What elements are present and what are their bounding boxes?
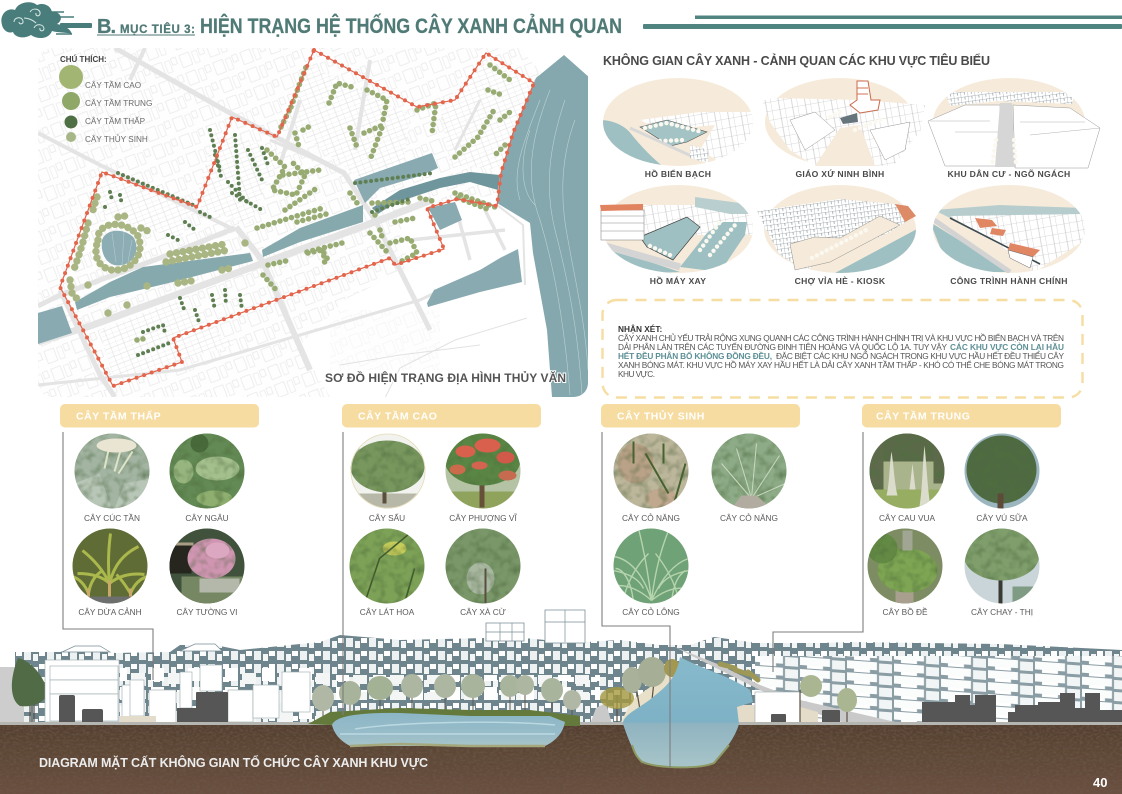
callout: assessment note: HẾT ĐỀU PHÂN BỐ KHÔNG ĐỒNG ĐỀU, [618,350,772,361]
trees: light clusters [96,224,140,270]
vignette labels: HỒ MÁY XAY [650,275,706,286]
plant labels: CÂY CỎ LÔNG [622,606,680,617]
vignette: Giáo xứ Ninh Bình [762,78,925,166]
plant: cây cỏ lông [614,528,688,604]
pond trees [312,674,581,720]
plant labels: CÂY NGÂU [185,513,229,523]
river water [623,657,753,768]
legend: CHÚ THÍCH: [60,55,107,64]
vignette: Khu dân cư - Ngõ ngách [928,78,1100,168]
callout: assessment note: ĐẶC BIỆT CÁC KHU NGÕ NGÁCH TRONG KHU VỰC HẦU HẾT ĐỀU THIẾU CÂY [776,351,1064,361]
heading: representative areas: KHÔNG GIAN CÂY XANH - CẢNH QUAN CÁC KHU VỰC TIÊU BIỂU [603,53,990,68]
legend: CÂY TẦM THẤP [85,116,146,126]
plant labels: CÂY SẤU [369,513,405,523]
icon: cloud logo [1,2,92,38]
category tag: medium trees: CÂY TẦM TRUNG [876,410,970,422]
callout: assessment note: CÁC KHU VỰC CÒN LẠI HẦU [950,341,1064,352]
plant labels: CÂY LÁT HOA [360,607,415,617]
category tag: medium trees [862,404,1061,428]
legend: CÂY TẦM CAO [85,80,141,90]
plant labels: CÂY CÚC TẦN [84,513,140,523]
vignette labels: CHỢ VỈA HÈ - KIOSK [795,275,886,286]
white lower-right zone [302,264,548,397]
plant labels: CÂY DỪA CẢNH [78,606,142,617]
category tag: low plants: CÂY TẦM THẤP [76,410,161,422]
dense residential rows [90,60,530,385]
plant: cây ngâu [170,434,244,508]
connector: medium trees to section [773,432,863,672]
plant labels: CÂY CỎ NĂNG [622,512,680,523]
canals and ponds [38,306,72,344]
vignette: Hồ Máy Xay [600,185,755,275]
plant labels: CÂY CHAY - THỊ [971,607,1033,617]
vignette labels: KHU DÂN CƯ - NGÕ NGÁCH [947,168,1071,179]
vignette labels [645,168,1071,286]
legend: CÂY THỦY SINH [85,133,148,144]
vignette: Chợ vỉa hè - Kiosk [757,185,917,275]
plant: cây cau vua [870,434,944,508]
header rule lines [643,16,1122,29]
distant skyline [15,635,1122,724]
riverside trees [600,657,857,722]
plant: cây cỏ năng 2 [712,434,786,508]
callout: assessment note [602,300,1082,398]
plant: cây vú sữa [964,434,1040,508]
foreground white buildings [45,660,119,722]
plant: cây sấu [350,434,426,508]
vignette labels: HỒ BIỂN BẠCH [645,168,711,179]
plant labels: CÂY PHƯỢNG VĨ [449,513,517,523]
plant labels: CÂY CAU VUA [879,513,936,523]
callout: assessment note: CÂY XANH CHỦ YẾU TRẢI RỘNG XUNG QUANH CÁC CÔNG TRÌNH HÀNH CHÍNH TRỊ VÀ KHU VỰC HỒ BIỂN BẠCH VÀ TRÊN [618,332,1064,343]
panel: section diagram [0,610,1122,794]
plant: cây dừa cảnh [72,528,148,604]
pond hedge [308,708,580,726]
plant: cây phượng vĩ [444,434,520,508]
soil [0,725,1122,794]
section caption: DIAGRAM MẶT CẤT KHÔNG GIAN TỔ CHỨC CÂY XANH KHU VỰC [39,755,428,770]
title [97,14,622,38]
panel: site map [38,48,590,398]
plant: cây bồ đề [868,528,942,604]
vignette labels: CÔNG TRÌNH HÀNH CHÍNH [950,275,1068,286]
category tag: tall trees: CÂY TẦM CAO [358,410,437,422]
title: MỤC TIÊU 3: [120,23,195,36]
ground strip [0,722,1122,726]
plant labels [78,512,1033,617]
map caption: SƠ ĐỒ HIỆN TRẠNG ĐỊA HÌNH THỦY VĂN [325,370,566,385]
plant labels: CÂY VÚ SỮA [976,513,1028,523]
callout: assessment note: KHU VỰC. [618,369,655,379]
plant: cây cỏ năng 1 [614,434,688,508]
plant labels: CÂY XÀ CỪ [460,607,506,617]
callout: assessment note: DẢI PHÂN LÀN TRÊN CÁC TUYẾN ĐƯỜNG ĐINH TIÊN HOÀNG VÀ QUỐC LỘ 1A. TUY VẬY [618,341,947,352]
plant: cây tường vi [170,528,244,604]
category tag: aquatic plants: CÂY THỦY SINH [617,410,705,422]
dark silhouettes left [59,695,75,725]
plant labels: CÂY TƯỜNG VI [177,607,237,617]
connector: aquatic plants to section [602,432,670,768]
dark silhouettes right [771,714,786,724]
category tag: tall trees [342,404,541,428]
roads [38,48,590,397]
legend: CÂY TẦM TRUNG [85,98,152,108]
main river [497,55,590,397]
connector: tall trees to section [342,432,344,715]
category tag: aquatic plants [601,404,800,428]
plant: cây xà cừ [446,528,520,604]
plant: cây lát hoa [350,528,424,604]
plant: cây chay - thị [964,528,1040,604]
connector: low plants to section [63,432,153,680]
plant labels: CÂY CỎ NĂNG [720,512,778,523]
callout: assessment note: NHẬN XÉT: [618,323,662,334]
title: B. [97,16,116,38]
plant: cây cúc tần [74,434,150,508]
site boundary [60,50,534,386]
vignette labels: GIÁO XỨ NINH BÌNH [795,168,885,179]
plant labels: CÂY BỒ ĐỀ [882,606,928,617]
river-side road and right-bank elements [590,703,612,724]
category tag: low plants [60,404,259,428]
pond water [332,713,565,746]
callout: assessment note: XANH BÓNG MÁT. KHU VỰC HỒ MÁY XAY HẦU HẾT LÀ DẢI CÂY XANH TẦM THẤP - KHÓ CÓ THỂ CHE BÓNG MÁT TRONG [618,359,1064,370]
title: HIỆN TRẠNG HỆ THỐNG CÂY XANH CẢNH QUAN [200,14,622,38]
vignette: Hồ Biển Bạch [600,78,755,168]
vignette: Công trình hành chính [930,185,1085,273]
page number: 40 [1093,775,1107,790]
left wall and tree [0,667,24,725]
legend [59,55,152,144]
